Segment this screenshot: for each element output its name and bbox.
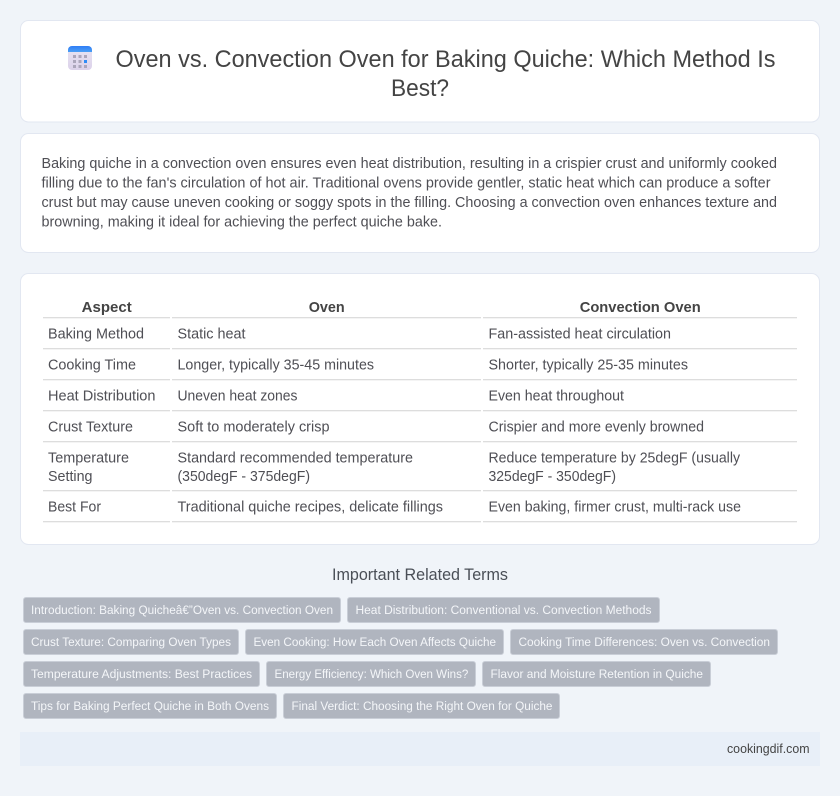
row: temperature setting: Temperature (48, 450, 129, 466)
row: best for: Best For (48, 500, 101, 516)
row: cooking time: Cooking Time (48, 358, 136, 374)
row: heat distribution: Even heat throughout (488, 388, 624, 404)
row: crust texture: Crust Texture (48, 420, 133, 436)
row: heat distribution (48, 388, 624, 404)
row: cooking time: Longer, typically 35-45 minutes (178, 358, 374, 374)
row: temperature setting: (350degF - 375degF) (178, 469, 310, 485)
row: crust texture: Soft to moderately crisp (178, 420, 330, 436)
tag: Even Cooking: How Each Oven Affects Quiche (254, 635, 496, 649)
row: heat distribution: Uneven heat zones (178, 388, 298, 404)
tag (510, 630, 778, 654)
tag: Energy Efficiency: Which Oven Wins? (274, 667, 468, 681)
tag (482, 662, 710, 686)
row: baking method: Static heat (178, 326, 246, 342)
row: temperature setting: Setting (48, 469, 92, 485)
table header (82, 300, 701, 316)
footer: cookingdif.com (727, 741, 810, 756)
panel: description (20, 134, 820, 252)
row: best for (48, 500, 741, 516)
icon: calendar (68, 46, 92, 70)
title: Oven vs. Convection Oven for Baking Quiche: Which Method Is (116, 46, 776, 73)
row: best for: Even baking, firmer crust, multi-rack use (488, 500, 741, 516)
row: temperature setting: 325degF - 350degF) (488, 469, 616, 485)
row: crust texture: Crispier and more evenly browned (488, 420, 704, 436)
title: Best? (391, 75, 449, 102)
tag (284, 694, 560, 718)
table header: Aspect (82, 300, 132, 316)
footer (20, 732, 820, 766)
tag (266, 662, 476, 686)
description text: filling due to the fan's circulation of hot air. Traditional ovens provide gentler, static heat which can produce a softer (42, 176, 771, 192)
tag (348, 598, 660, 622)
row: crust texture (48, 420, 704, 436)
description text (42, 156, 777, 230)
table header: Convection Oven (580, 300, 701, 316)
row: cooking time (48, 358, 688, 374)
tag (24, 630, 238, 654)
tag: Temperature Adjustments: Best Practices (31, 667, 252, 681)
panel: comparison table (20, 274, 820, 544)
row: cooking time: Shorter, typically 25-35 minutes (488, 358, 688, 374)
row: temperature setting: Reduce temperature by 25degF (usually (488, 450, 741, 466)
tag: Final Verdict: Choosing the Right Oven for Quiche (292, 699, 553, 713)
title (116, 46, 776, 102)
tag (24, 662, 260, 686)
tag: Flavor and Moisture Retention in Quiche (490, 667, 703, 681)
row: heat distribution: Heat Distribution (48, 388, 156, 404)
description text: Baking quiche in a convection oven ensures even heat distribution, resulting in a crispier crust and uniformly cooked (42, 156, 777, 172)
description text: crust but may cause uneven cooking or soggy spots in the filling. Choosing a convection oven enhances texture and (42, 195, 777, 211)
related term tags (24, 598, 778, 718)
table header: Oven (309, 300, 345, 316)
tag: Cooking Time Differences: Oven vs. Convection (518, 635, 770, 649)
heading: related terms: Important Related Terms (332, 566, 508, 584)
tag: Introduction: Baking Quicheâ€”Oven vs. Convection Oven (31, 603, 333, 617)
tag (246, 630, 504, 654)
description text: browning, making it ideal for achieving the perfect quiche bake. (42, 214, 442, 230)
tag (24, 598, 340, 622)
row: baking method (48, 326, 671, 342)
tag: Tips for Baking Perfect Quiche in Both Ovens (31, 699, 269, 713)
tag: Heat Distribution: Conventional vs. Convection Methods (356, 603, 652, 617)
row: baking method: Baking Method (48, 326, 144, 342)
panel: header (20, 20, 820, 122)
row: temperature setting (48, 450, 741, 485)
tag (24, 694, 276, 718)
tag: Crust Texture: Comparing Oven Types (31, 635, 231, 649)
row: temperature setting: Standard recommended temperature (178, 450, 413, 466)
row: best for: Traditional quiche recipes, delicate fillings (178, 500, 443, 516)
row: baking method: Fan-assisted heat circulation (488, 326, 671, 342)
